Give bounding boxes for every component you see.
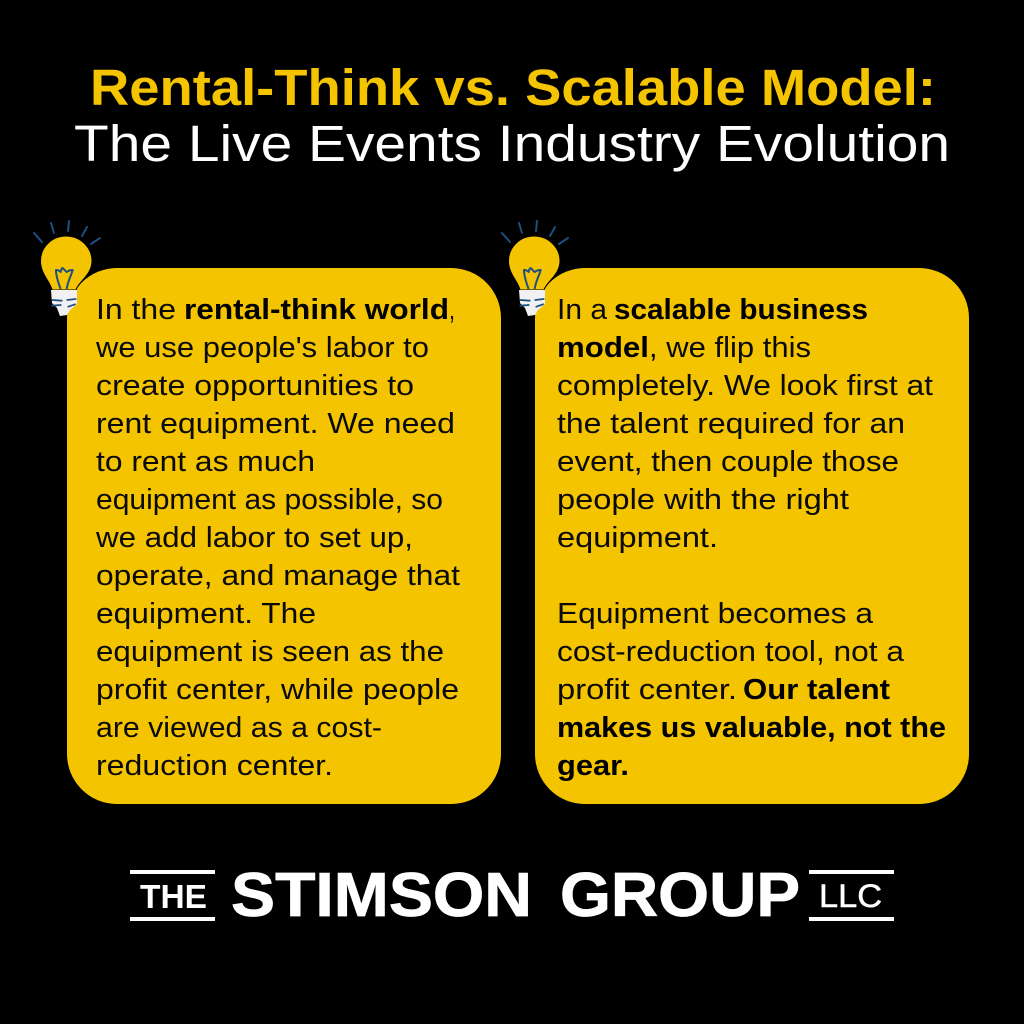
- panel: rental-think world: we use people's labor to: [95, 332, 429, 364]
- panel: scalable business model: model: [557, 332, 649, 364]
- icon: light bulb left: [34, 221, 100, 316]
- panel: scalable business model: cost-reduction tool, not a: [557, 636, 904, 668]
- panel: rental-think world: In the: [96, 294, 176, 326]
- panel: rental-think world: we add labor to set up,: [95, 522, 413, 554]
- panel: rental-think world: rental-think world: [184, 294, 449, 326]
- logo: The Stimson Group LLC: THE: [140, 878, 207, 915]
- panel: rental-think world: [67, 268, 501, 804]
- logo: The Stimson Group LLC: STIMSON: [231, 861, 532, 930]
- panel: rental-think world: equipment is seen as the: [96, 636, 444, 668]
- panel: scalable business model: Our talent: [743, 674, 891, 706]
- panel: scalable business model: scalable business: [614, 294, 868, 326]
- panel: scalable business model: In a: [557, 294, 607, 326]
- panel: rental-think world: reduction center.: [96, 750, 333, 782]
- panel: rental-think world: are viewed as a cost-: [96, 712, 382, 744]
- title: The Live Events Industry Evolution: [74, 115, 950, 172]
- logo: The Stimson Group LLC: GROUP: [560, 861, 800, 930]
- panel: scalable business model: profit center.: [557, 674, 737, 706]
- panel: rental-think world: equipment as possible, so: [96, 484, 443, 516]
- panel: rental-think world: to rent as much: [96, 446, 315, 478]
- title: Rental-Think vs. Scalable Model:: [90, 59, 936, 116]
- panel: scalable business model: Equipment becomes a: [557, 598, 873, 630]
- title: [74, 59, 950, 172]
- icon: light bulb right: [502, 221, 568, 316]
- panel: rental-think world: operate, and manage that: [96, 560, 460, 592]
- panel: rental-think world: create opportunities to: [96, 370, 414, 402]
- panel: scalable business model: [535, 268, 969, 804]
- panel: scalable business model: gear.: [557, 750, 629, 782]
- panel: scalable business model: people with the right: [557, 484, 849, 516]
- panel: rental-think world: rent equipment. We need: [96, 408, 455, 440]
- panel: scalable business model: event, then couple those: [557, 446, 899, 478]
- panel: rental-think world: profit center, while people: [96, 674, 459, 706]
- panel: scalable business model: completely. We look first at: [557, 370, 933, 402]
- panel: rental-think world: ,: [449, 294, 455, 326]
- panel: scalable business model: , we flip this: [649, 332, 811, 364]
- panel: scalable business model: equipment.: [557, 522, 718, 554]
- panel: rental-think world: equipment. The: [96, 598, 316, 630]
- logo: The Stimson Group LLC: LLC: [819, 878, 882, 914]
- logo: The Stimson Group LLC: [130, 861, 894, 930]
- panel: scalable business model: makes us valuable, not the: [557, 712, 946, 744]
- panel: scalable business model: the talent required for an: [557, 408, 905, 440]
